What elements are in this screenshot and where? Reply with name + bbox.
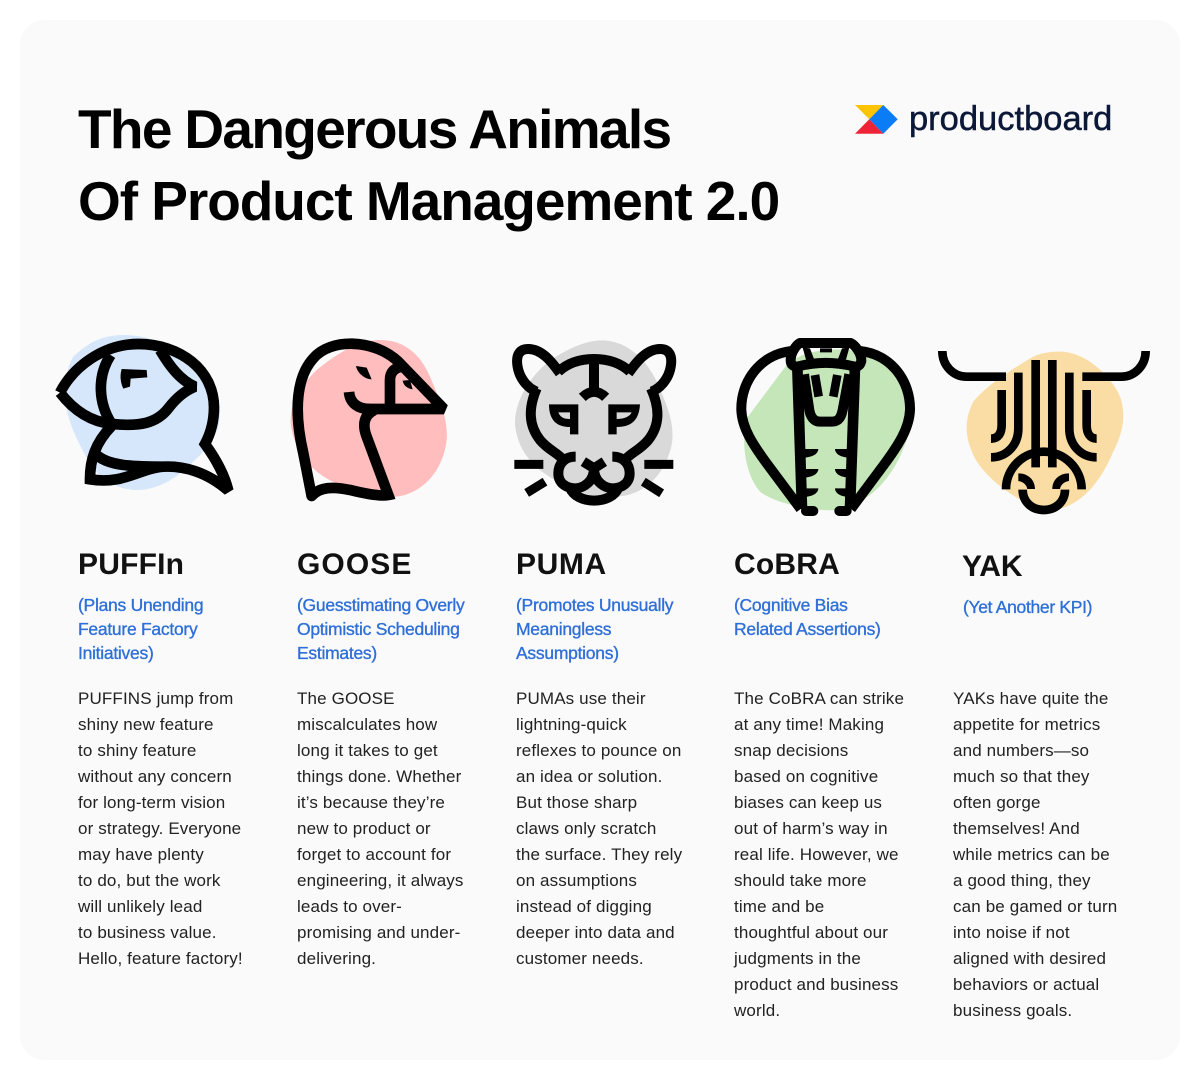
body text: puma: lightning-quick xyxy=(516,715,627,734)
body text: goose: The GOOSE xyxy=(297,689,395,708)
body text: cobra: thoughtful about our xyxy=(734,923,888,942)
body text: cobra: The CoBRA can strike xyxy=(734,689,904,708)
body text: puma: PUMAs use their xyxy=(516,689,646,708)
subheading: puffin xyxy=(78,595,203,663)
column: yak xyxy=(953,550,1117,1020)
column: puffin xyxy=(78,548,243,968)
subheading: puma: Assumptions) xyxy=(516,643,619,663)
body text: yak: appetite for metrics xyxy=(953,715,1100,734)
body text: puma: on assumptions xyxy=(516,871,637,890)
body text: cobra: time and be xyxy=(734,897,824,916)
body text: puma: the surface. They rely xyxy=(516,845,682,864)
subheading: goose: (Guesstimating Overly xyxy=(297,595,464,615)
body text: goose: miscalculates how xyxy=(297,715,437,734)
body text: yak: YAKs have quite the xyxy=(953,689,1108,708)
logo wordmark: productboard xyxy=(909,100,1112,138)
body text: yak: much so that they xyxy=(953,767,1090,786)
title xyxy=(78,98,779,232)
heading: PUFFIn: PUFFIn xyxy=(78,548,184,581)
title: Of Product Management 2.0 xyxy=(78,170,779,232)
body text: yak: behaviors or actual xyxy=(953,975,1099,994)
subheading: goose: Optimistic Scheduling xyxy=(297,619,460,639)
column: cobra xyxy=(734,548,904,1020)
body text: cobra xyxy=(734,689,904,1020)
body text: yak: often gorge xyxy=(953,793,1041,812)
body text: puma xyxy=(516,689,682,968)
column: puma xyxy=(516,548,682,968)
body text: goose: delivering. xyxy=(297,949,376,968)
body text: goose: new to product or xyxy=(297,819,431,838)
logo: productboard xyxy=(855,100,1112,138)
body text: yak: can be gamed or turn xyxy=(953,897,1117,916)
body text: puma: But those sharp xyxy=(516,793,637,812)
body text: cobra: out of harm’s way in xyxy=(734,819,888,838)
body text: cobra: biases can keep us xyxy=(734,793,882,812)
body text: puffin: to do, but the work xyxy=(78,871,221,890)
body text: puma: reflexes to pounce on xyxy=(516,741,682,760)
body text: puffin: without any concern xyxy=(78,767,232,786)
title: The Dangerous Animals xyxy=(78,98,670,160)
body text: puffin: may have plenty xyxy=(78,845,204,864)
subheading: yak: (Yet Another KPI) xyxy=(963,597,1092,617)
body text: puffin: will unlikely lead xyxy=(78,897,202,916)
body text: cobra: at any time! Making xyxy=(734,715,884,734)
heading: PUMA: PUMA xyxy=(516,548,607,581)
body text: puma: customer needs. xyxy=(516,949,644,968)
body text: goose xyxy=(297,689,464,968)
body text: cobra: product and business xyxy=(734,975,898,994)
subheading: cobra xyxy=(734,595,881,639)
body text: cobra: snap decisions xyxy=(734,741,848,760)
body text: goose: engineering, it always xyxy=(297,871,464,890)
subheading: puffin: Initiatives) xyxy=(78,643,154,663)
body text: puffin: to business value. xyxy=(78,923,217,942)
body text: goose: forget to account for xyxy=(297,845,451,864)
body text: yak: business goals. xyxy=(953,1001,1072,1020)
body text: puma: claws only scratch xyxy=(516,819,656,838)
body text: puffin: Hello, feature factory! xyxy=(78,949,243,968)
heading: GOOSE: GOOSE xyxy=(297,548,413,581)
subheading: goose xyxy=(297,595,465,663)
subheading: puma: Meaningless xyxy=(516,619,611,639)
body text: yak: and numbers—so xyxy=(953,741,1089,760)
heading: CoBRA: CoBRA xyxy=(734,548,840,581)
body text: goose: long it takes to get xyxy=(297,741,438,760)
subheading: puma xyxy=(516,595,674,663)
column: goose xyxy=(297,548,465,968)
subheading: puffin: Feature Factory xyxy=(78,619,197,639)
body text: puffin xyxy=(78,689,243,968)
body text: goose: leads to over- xyxy=(297,897,402,916)
body text: puffin: for long-term vision xyxy=(78,793,225,812)
body text: puffin: shiny new feature xyxy=(78,715,214,734)
subheading: goose: Estimates) xyxy=(297,643,377,663)
body text: yak: themselves! And xyxy=(953,819,1080,838)
body text: puffin: PUFFINS jump from xyxy=(78,689,233,708)
subheading: cobra: (Cognitive Bias xyxy=(734,595,848,615)
body text: cobra: real life. However, we xyxy=(734,845,899,864)
icon: productboard mark xyxy=(855,105,898,134)
body text: yak: aligned with desired xyxy=(953,949,1106,968)
body text: cobra: should take more xyxy=(734,871,867,890)
subheading: puffin: (Plans Unending xyxy=(78,595,203,615)
body text: yak: while metrics can be xyxy=(953,845,1110,864)
body text: yak xyxy=(953,689,1117,1020)
body text: puma: an idea or solution. xyxy=(516,767,662,786)
body text: goose: promising and under- xyxy=(297,923,460,942)
body text: puma: deeper into data and xyxy=(516,923,675,942)
body text: yak: a good thing, they xyxy=(953,871,1091,890)
body text: yak: into noise if not xyxy=(953,923,1070,942)
subheading: puma: (Promotes Unusually xyxy=(516,595,673,615)
body text: cobra: based on cognitive xyxy=(734,767,878,786)
body text: puffin: or strategy. Everyone xyxy=(78,819,241,838)
body text: puma: instead of digging xyxy=(516,897,652,916)
body text: puffin: to shiny feature xyxy=(78,741,196,760)
heading: YAK: YAK xyxy=(962,550,1023,583)
body text: cobra: world. xyxy=(734,1001,780,1020)
body text: goose: it’s because they’re xyxy=(297,793,445,812)
body text: goose: things done. Whether xyxy=(297,767,461,786)
body text: cobra: judgments in the xyxy=(734,949,861,968)
subheading: cobra: Related Assertions) xyxy=(734,619,881,639)
